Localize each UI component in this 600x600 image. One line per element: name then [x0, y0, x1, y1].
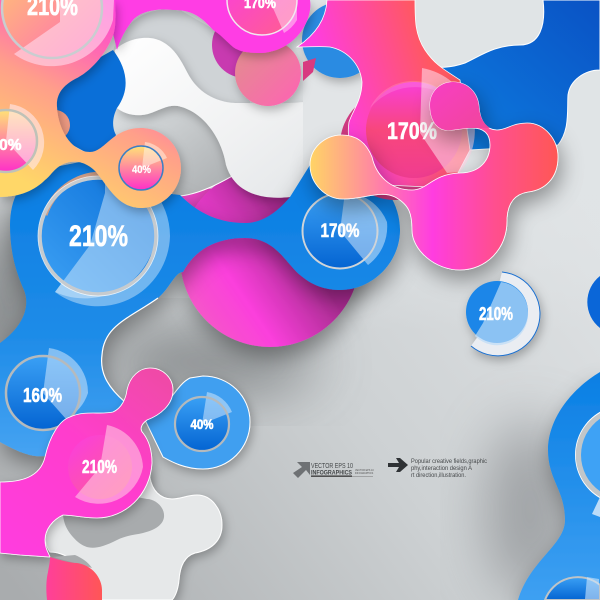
pink and orange shape top left [0, 0, 181, 208]
caption text: rt direction,illustration. [411, 473, 466, 479]
grey paper shape top [110, 9, 250, 110]
gauge: cropped left [0, 104, 44, 172]
gauge: 40 percent small [119, 142, 167, 190]
gauge: 170 percent blue [302, 192, 387, 268]
salmon piece [40, 110, 70, 140]
grey paper shape centre [112, 100, 234, 196]
dark circle behind 170 percent [340, 90, 450, 200]
gauge: 210 percent right: 210% [479, 304, 513, 324]
blue ring shape with 40 percent gauge: 40% [190, 416, 214, 432]
vector logo text: VECTOR EPS 10 [311, 463, 353, 470]
vector logo text: INFOGRAPHICS [311, 470, 353, 476]
vector logo text: INFOGRAPHICS [355, 472, 374, 475]
dark blue hole [45, 50, 126, 160]
salmon circle [235, 40, 301, 106]
coral lobe bottom [46, 557, 102, 600]
blue shape bottom right [518, 372, 600, 600]
grey hole bottom [63, 490, 164, 548]
white paper shape bottom [45, 470, 222, 600]
gauge: 170 percent top [227, 0, 297, 35]
caption text: Popular creative fields,graphic [411, 459, 487, 465]
caption text: phy,interaction design A [411, 466, 472, 472]
blue ring shape with 40 percent gauge [145, 376, 250, 469]
pink lobe [430, 82, 490, 130]
pink blob top [297, 0, 470, 188]
gauge: 210 percent right [466, 272, 540, 356]
big pink circle [180, 167, 360, 347]
white paper shape [115, 38, 320, 198]
dark arrow [388, 458, 408, 472]
pink band top [105, 0, 310, 53]
gauge: 210 percent pink: 210% [82, 457, 117, 477]
pink shape bottom left [0, 368, 173, 557]
caption text [411, 459, 487, 479]
white curve on blue edge [102, 298, 158, 402]
blue ring behind top [302, 2, 378, 78]
gauge: 170 percent large: 170% [387, 118, 437, 145]
gauge: right edge [575, 412, 600, 517]
gauge: 210 percent pink [68, 425, 143, 504]
gauge: 40 percent small: 40% [132, 164, 151, 176]
gauge: 210 percent large [38, 165, 170, 306]
grey notch bottom [53, 555, 92, 568]
main pink blob with yellow lobe [310, 82, 558, 270]
gauge: 160 percent [6, 348, 88, 430]
gauge: 170 percent blue: 170% [320, 221, 360, 242]
gauge: 160 percent: 160% [23, 385, 62, 407]
gauge: 210 percent top left [2, 0, 114, 66]
gauge: 210 percent large: 210% [69, 220, 128, 253]
blue main shape [0, 160, 400, 456]
magenta sliver behind arch [178, 185, 295, 250]
vector logo text: VECTOR EPS 10 [355, 469, 374, 472]
blue blob top right [430, 0, 600, 150]
vector logo arrow [293, 462, 310, 478]
vector logo text [311, 463, 374, 477]
small dark pink piece [303, 58, 316, 81]
magenta circle behind top [212, 12, 278, 78]
light patch right of white shape [303, 55, 373, 195]
blue circle far right [587, 276, 600, 328]
gauge: 170 percent large [366, 68, 475, 178]
gauge: bottom edge [545, 577, 600, 600]
